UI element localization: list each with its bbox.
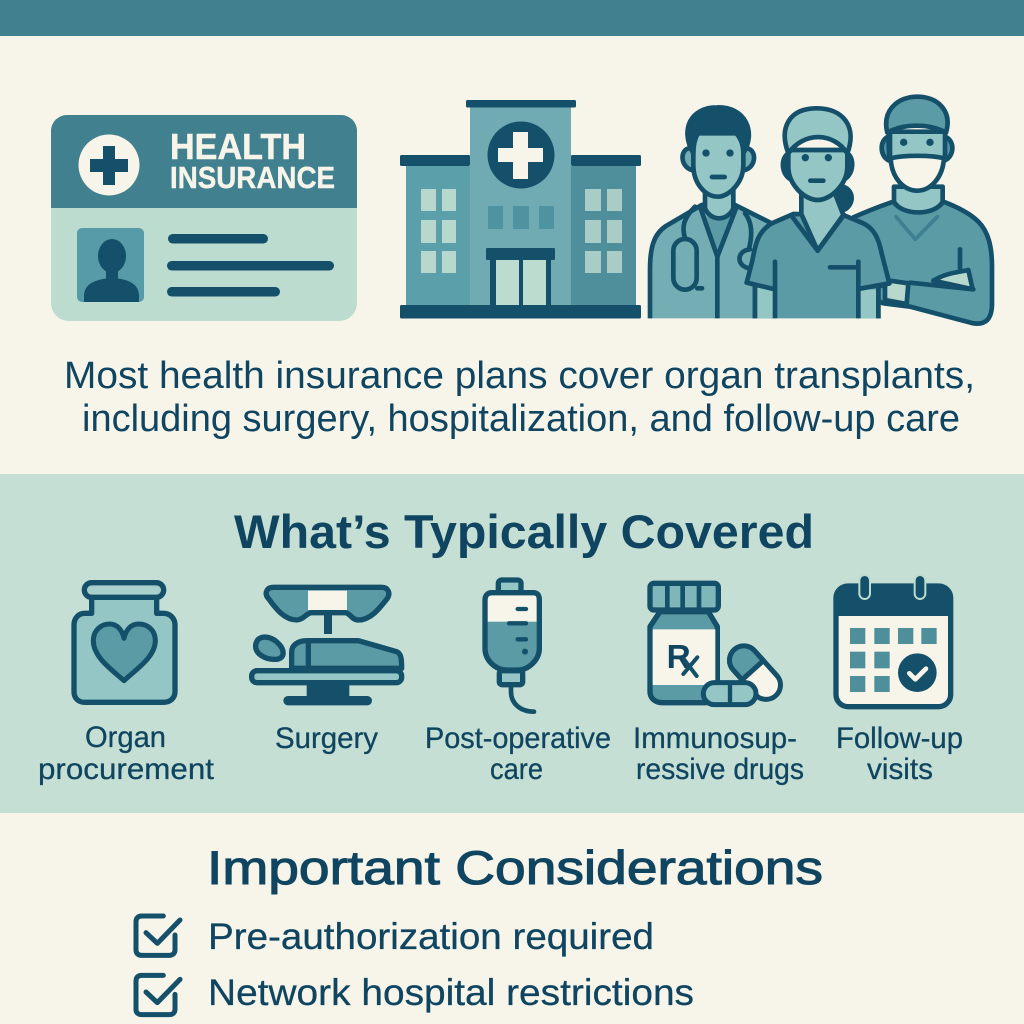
illustration: medical team: [650, 97, 992, 324]
heading: what's typically covered: What’s Typically Covered: [234, 505, 814, 558]
label: immunosuppressive drugs: ressive drugs: [636, 753, 804, 786]
icon: prescription bottle and pills: [650, 583, 786, 705]
icon: checkbox 2: [136, 975, 180, 1015]
label: follow-up visits: Follow-up: [836, 722, 963, 755]
calendar days: [850, 628, 937, 692]
card photo: [77, 228, 144, 302]
icon: checkbox 1: [136, 916, 180, 955]
label: surgery: Surgery: [275, 722, 378, 755]
label: organ procurement: procurement: [38, 753, 215, 786]
icon: health insurance card: [51, 115, 357, 321]
icon: organ jar with heart: [74, 583, 175, 702]
doctor: [650, 107, 772, 323]
icon: calendar with checkmark: [834, 575, 953, 707]
text: network hospital restrictions: Network hospital restrictions: [208, 972, 694, 1013]
icon: surgery table and lamp: [252, 587, 402, 705]
text: pre-authorization required: Pre-authorization required: [208, 916, 654, 957]
label: post-operative care: [425, 722, 611, 786]
intro text: including surgery, hospitalization, and follow-up care: [82, 398, 960, 440]
icon: IV drip bag: [485, 580, 539, 712]
nurse: [747, 108, 889, 323]
intro text: Most health insurance plans cover organ transplants,: [64, 355, 975, 397]
label: post-operative care: care: [490, 753, 543, 786]
hospital entrance: [486, 248, 555, 306]
label: post-operative care: Post-operative: [425, 722, 611, 755]
card title: [170, 126, 335, 195]
heading: important considerations: Important Considerations: [207, 841, 823, 894]
label: follow-up visits: [836, 722, 963, 786]
card title: INSURANCE: [170, 160, 335, 195]
icon: hospital building: [400, 100, 641, 318]
label: immunosuppressive drugs: Immunosup-: [633, 722, 797, 755]
card title: HEALTH: [170, 126, 306, 167]
top header band: [0, 0, 1024, 36]
capsule pills: [703, 640, 786, 705]
Rx label: R: [667, 639, 691, 676]
label: organ procurement: [38, 721, 215, 786]
surgeon: [853, 97, 992, 324]
panel: what's covered background: [0, 474, 1024, 813]
intro text: [64, 355, 975, 440]
card text lines: [167, 234, 334, 296]
label: follow-up visits: visits: [867, 753, 933, 786]
label: immunosuppressive drugs: [633, 722, 804, 786]
hospital windows: [421, 189, 622, 273]
label: organ procurement: Organ: [85, 721, 166, 754]
